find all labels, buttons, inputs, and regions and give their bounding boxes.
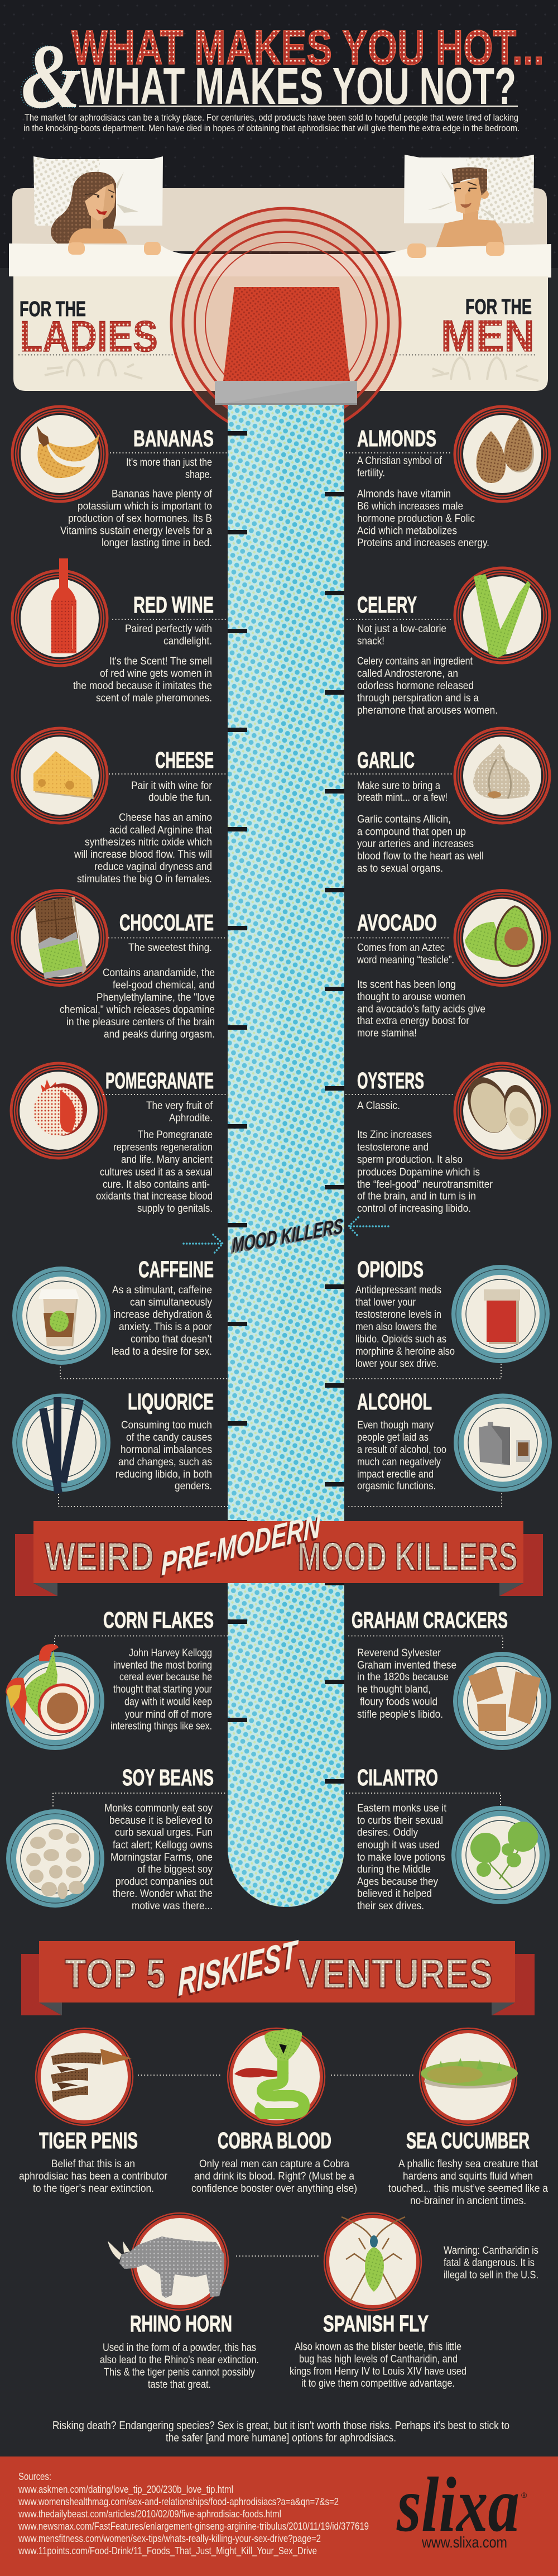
text block: snack! bbox=[357, 635, 384, 647]
concentric heat rings bbox=[171, 208, 400, 437]
banner: top 5 riskiest ventures bbox=[21, 1932, 535, 2015]
text block: and peaks during orgasm. bbox=[104, 1029, 215, 1040]
panel: cobra blood bbox=[191, 2028, 357, 2195]
heading: OPIOIDS bbox=[357, 1256, 424, 1282]
text block: fertility. bbox=[357, 467, 385, 479]
icon: rhino bbox=[108, 2213, 228, 2310]
text block: Only real men can capture a Cobra bbox=[199, 2158, 349, 2170]
text block bbox=[290, 2341, 466, 2389]
man bbox=[436, 168, 504, 247]
text block: of the brain, and in turn is in bbox=[357, 1191, 476, 1202]
text block: It's the Scent! The smell bbox=[109, 656, 212, 667]
text block: increase dehydration & bbox=[113, 1309, 212, 1321]
text block: genders. bbox=[175, 1480, 212, 1492]
text block: Ages because they bbox=[357, 1876, 438, 1887]
text block: desires. Oddly bbox=[357, 1827, 418, 1838]
text block: supply to genitals. bbox=[137, 1203, 213, 1215]
text block: cereal ever because he bbox=[119, 1671, 212, 1683]
banner text: TOP 5 bbox=[65, 1951, 166, 1997]
text block: cultures used it as a sexual bbox=[100, 1167, 213, 1178]
text block: Celery contains an ingredient bbox=[357, 656, 473, 667]
blanket bbox=[9, 243, 551, 278]
text block: cure. It also contains anti- bbox=[103, 1179, 210, 1191]
icon: rooster and cereal bbox=[6, 1644, 104, 1750]
knee wrinkles bbox=[45, 357, 538, 381]
icon: cobra bbox=[228, 2028, 325, 2125]
text block: it to give them competitive advantage. bbox=[301, 2378, 455, 2389]
pre-modern stamp: PRE-MODERN bbox=[161, 1508, 321, 1583]
icon: chocolate bbox=[12, 890, 107, 985]
panel: spanish fly bbox=[290, 2213, 466, 2389]
text block bbox=[112, 1284, 213, 1358]
text block: Monks commonly eat soy bbox=[104, 1803, 213, 1814]
sources: www.womenshealthmag.com/sex-and-relationships/food-aphrodisiacs?a=a&qn=7&s=2 bbox=[18, 2496, 339, 2507]
text block: Also known as the blister beetle, this little bbox=[295, 2341, 461, 2353]
text block: and changes, such as bbox=[118, 1456, 212, 1468]
text block: Comes from an Aztec bbox=[357, 942, 445, 954]
woman bbox=[51, 172, 127, 243]
riskiest stamp: RISKIEST bbox=[178, 1932, 299, 2005]
text block: bug has high levels of Cantharidin, and bbox=[299, 2353, 458, 2365]
footer bbox=[0, 2456, 558, 2576]
hands bbox=[68, 242, 504, 258]
text block: and drink its blood. Right? (Must be a bbox=[194, 2171, 354, 2182]
text block: This & the tiger penis cannot possibly bbox=[104, 2367, 255, 2378]
text block: morphine & heroine also bbox=[355, 1346, 455, 1358]
heading: ALMONDS bbox=[357, 426, 436, 451]
text block: acid called Arginine that bbox=[109, 824, 213, 837]
icon: sea cucumber bbox=[420, 2028, 518, 2125]
text block: that extra energy boost for bbox=[357, 1015, 470, 1027]
panel: chocolate bbox=[12, 890, 225, 1040]
text block: sperm production. It also bbox=[357, 1154, 463, 1166]
heading: CELERY bbox=[357, 592, 417, 618]
text block: there. Wonder what the bbox=[113, 1888, 213, 1900]
text block: reducing libido, in both bbox=[116, 1469, 212, 1480]
text block: their sex drives. bbox=[357, 1900, 424, 1912]
warning note bbox=[444, 2245, 538, 2281]
text block bbox=[60, 942, 215, 1040]
text block: Even though many bbox=[357, 1420, 434, 1431]
icon: coffee cup bbox=[12, 1267, 110, 1365]
text block: stimulates the big O in females. bbox=[77, 873, 212, 885]
panel: pomegranate bbox=[11, 1063, 227, 1215]
mood killers label: MOOD KILLERS bbox=[232, 1214, 343, 1258]
text block: Pair it with wine for bbox=[131, 780, 213, 792]
text block: Proteins and increases energy. bbox=[357, 537, 489, 549]
text block: hardens and squirts fluid when bbox=[403, 2171, 533, 2182]
text block bbox=[191, 2158, 357, 2195]
text block: of red wine gets women in bbox=[100, 668, 212, 680]
text block: pheramone that arouses women. bbox=[357, 705, 498, 716]
icon: liquorice bbox=[12, 1394, 110, 1493]
text block: double the fun. bbox=[148, 792, 212, 804]
text block: kings from Henry IV to Louis XIV have used bbox=[290, 2365, 466, 2378]
text block: invented the most boring bbox=[114, 1660, 212, 1671]
text block: Contains anandamide, the bbox=[103, 967, 215, 979]
sources: www.thedailybeast.com/articles/2010/02/09/five-aphrodisiac-foods.html bbox=[18, 2508, 281, 2520]
title bbox=[19, 21, 544, 127]
banner text: WEIRD bbox=[45, 1535, 154, 1579]
text block: testosterone and bbox=[357, 1141, 429, 1154]
text block: fact alert; Kellogg owns bbox=[113, 1839, 213, 1851]
text block: word meaning “testicle”. bbox=[357, 954, 454, 966]
text block: day with it would keep bbox=[124, 1696, 212, 1708]
text block: Eastern monks use it bbox=[357, 1803, 447, 1814]
text block: combo that doesn’t bbox=[131, 1334, 213, 1345]
for the ladies: FOR THE bbox=[20, 298, 86, 321]
panel: bananas bbox=[12, 407, 227, 549]
text block: men also lowers the bbox=[355, 1321, 437, 1333]
icon: wine bottle bbox=[12, 558, 107, 666]
panel: alcohol bbox=[347, 1389, 552, 1507]
icon: pill bottle bbox=[451, 1265, 550, 1363]
heading: RHINO HORN bbox=[130, 2311, 232, 2336]
icon: garlic bbox=[455, 728, 550, 823]
text block bbox=[355, 1284, 455, 1370]
text block: longer lasting time in bed. bbox=[102, 537, 212, 549]
text block: and avocado’s fatty acids give bbox=[357, 1003, 485, 1015]
icon: beetle bbox=[324, 2213, 421, 2310]
text block: stifle people’s libido. bbox=[357, 1709, 443, 1720]
panel: graham crackers bbox=[349, 1607, 551, 1750]
text block: can simultaneously bbox=[130, 1297, 212, 1308]
heading: SPANISH FLY bbox=[323, 2311, 429, 2336]
text block bbox=[104, 1803, 213, 1912]
text block bbox=[357, 1420, 446, 1492]
text block: oxidants that increase blood bbox=[96, 1191, 213, 1202]
text block: lower your sex drive. bbox=[355, 1358, 439, 1370]
heading: CORN FLAKES bbox=[103, 1607, 214, 1633]
text block: the “feel-good” neurotransmitter bbox=[357, 1179, 493, 1191]
text block: the mood because it imitates the bbox=[73, 680, 212, 692]
closing statement bbox=[52, 2420, 509, 2444]
text block: A Classic. bbox=[357, 1100, 400, 1112]
icon: cheese bbox=[12, 728, 107, 823]
heading: CHOCOLATE bbox=[119, 910, 214, 935]
text block: Aphrodite. bbox=[169, 1112, 213, 1124]
bed base bbox=[13, 276, 548, 391]
text block: synthesizes nitric oxide which bbox=[85, 837, 212, 848]
text block: production of sex hormones. Its B bbox=[68, 513, 212, 525]
text block bbox=[110, 1647, 213, 1732]
text block bbox=[388, 2158, 548, 2207]
sources bbox=[18, 2471, 369, 2557]
icon: flask bbox=[454, 1394, 552, 1492]
warning note: Warning: Cantharidin is bbox=[444, 2245, 538, 2257]
text block bbox=[96, 1100, 213, 1215]
text block: touched... this must’ve seemed like a bbox=[388, 2183, 548, 2195]
panel: avocado bbox=[345, 890, 550, 1039]
text block: Cheese has an amino bbox=[119, 812, 212, 824]
text block: scent of male pheromones. bbox=[96, 692, 212, 704]
heading: BANANAS bbox=[133, 426, 214, 451]
text block: feel-good chemical, and bbox=[113, 979, 215, 991]
arrow: right bbox=[349, 1217, 388, 1236]
right tick marks bbox=[325, 492, 344, 1784]
text block: Garlic contains Allicin, bbox=[357, 814, 451, 825]
text block: product companies out bbox=[116, 1876, 213, 1887]
icon: almonds bbox=[455, 407, 550, 501]
text block: Morningstar Farms, one bbox=[110, 1852, 213, 1863]
text block: to the tiger’s near extinction. bbox=[33, 2183, 154, 2195]
text block: represents regeneration bbox=[113, 1141, 213, 1154]
text block: reduce vaginal dryness and bbox=[94, 861, 212, 873]
thermometer cap bbox=[215, 381, 357, 405]
heading: RED WINE bbox=[133, 592, 214, 618]
panel: corn flakes bbox=[6, 1607, 228, 1750]
text block: candlelight. bbox=[163, 635, 212, 647]
text block: in the 1820s because bbox=[357, 1671, 449, 1683]
text block: blood flow to the heart as well bbox=[357, 850, 484, 862]
for the men bbox=[391, 295, 537, 361]
text block: Belief that this is an bbox=[51, 2158, 135, 2170]
text block: odorless hormone released bbox=[357, 680, 474, 692]
panel: caffeine bbox=[12, 1256, 228, 1379]
text block: chemical," which releases dopamine bbox=[60, 1004, 215, 1016]
sources: www.11points.com/Food-Drink/11_Foods_That_Just_Might_Kill_Your_Sex_Drive bbox=[18, 2545, 317, 2557]
icon: oysters bbox=[455, 1063, 550, 1158]
text block: Paired perfectly with bbox=[125, 623, 212, 635]
text block: taste that great. bbox=[148, 2379, 211, 2391]
text block bbox=[357, 942, 485, 1039]
text block: The Pomegranate bbox=[138, 1129, 213, 1141]
heading: AVOCADO bbox=[357, 910, 437, 935]
panel: cilantro bbox=[347, 1765, 550, 1912]
text block: and life. Many ancient bbox=[121, 1154, 213, 1166]
text block: to make love potions bbox=[357, 1852, 445, 1863]
text block: curb sexual urges. Fun bbox=[115, 1827, 213, 1838]
text block: as to sexual organs. bbox=[357, 863, 443, 874]
text block: Acid which metabolizes bbox=[357, 525, 457, 537]
icon: soy beans bbox=[6, 1809, 104, 1908]
text block: impact erectile and bbox=[357, 1469, 434, 1480]
pillow right bbox=[404, 155, 534, 223]
text block: Its scent has been long bbox=[357, 979, 456, 991]
text block: of the biggest soy bbox=[137, 1864, 213, 1875]
heading: TIGER PENIS bbox=[39, 2128, 138, 2153]
text block: enough it was used bbox=[357, 1839, 440, 1851]
text block: Graham invented these bbox=[357, 1660, 456, 1671]
logo: slixa bbox=[396, 2462, 519, 2548]
text block bbox=[73, 623, 212, 704]
sources: Sources: bbox=[18, 2471, 51, 2482]
sources: www.mensfitness.com/women/sex-tips/whats-really-killing-your-sex-drive?page=2 bbox=[18, 2533, 321, 2544]
text block: lead to a desire for sex. bbox=[112, 1346, 212, 1358]
icon: celery bbox=[455, 568, 550, 663]
text block: Vitamins sustain energy levels for a bbox=[60, 525, 212, 537]
heading: SOY BEANS bbox=[122, 1765, 214, 1790]
panel: rhino horn bbox=[100, 2213, 259, 2391]
text block: will increase blood flow. This will bbox=[74, 849, 212, 861]
ampersand: & bbox=[21, 25, 81, 127]
text block: breath mint... or a few! bbox=[357, 792, 448, 804]
text block: A Christian symbol of bbox=[357, 455, 442, 467]
text block: he thought bland, bbox=[357, 1684, 431, 1695]
text block: Make sure to bring a bbox=[357, 780, 440, 792]
heading: CHEESE bbox=[155, 747, 214, 773]
text block: that lower your bbox=[355, 1297, 416, 1308]
heading: CAFFEINE bbox=[138, 1256, 214, 1282]
heading: COBRA BLOOD bbox=[218, 2128, 331, 2153]
text block: anxiety. This is a poor bbox=[119, 1321, 213, 1333]
panel: red wine bbox=[12, 558, 225, 704]
text block: testosterone levels in bbox=[355, 1309, 441, 1321]
text block bbox=[74, 780, 213, 885]
left tick marks bbox=[228, 431, 247, 1722]
warning note: fatal & dangerous. It is bbox=[444, 2257, 535, 2269]
text block bbox=[357, 455, 489, 549]
text block: John Harvey Kellogg bbox=[129, 1647, 212, 1659]
arrow: left bbox=[184, 1235, 223, 1254]
panel: liquorice bbox=[12, 1389, 228, 1507]
intro paragraph bbox=[23, 112, 519, 133]
panel: almonds bbox=[347, 407, 550, 549]
text block bbox=[19, 2158, 168, 2195]
icon: pomegranate bbox=[11, 1063, 106, 1158]
text block bbox=[357, 1647, 456, 1720]
icon: tiger penis bbox=[36, 2028, 133, 2125]
text block: your arteries and increases bbox=[357, 838, 474, 850]
panel: oysters bbox=[346, 1063, 550, 1215]
text block: Consuming too much bbox=[121, 1420, 212, 1431]
text block: Almonds have vitamin bbox=[357, 488, 451, 500]
text block: aphrodisiac has been a contributor bbox=[19, 2171, 168, 2182]
logo: www.slixa.com bbox=[421, 2534, 507, 2551]
text block: Not just a low-calorie bbox=[357, 623, 446, 635]
panel: soy beans bbox=[6, 1765, 227, 1912]
text block bbox=[116, 1420, 212, 1492]
warning note: illegal to sell in the U.S. bbox=[444, 2269, 538, 2281]
text block: shape. bbox=[185, 469, 212, 481]
heading: GARLIC bbox=[357, 747, 415, 773]
text block: motive was there... bbox=[132, 1900, 213, 1912]
pillow left bbox=[33, 156, 163, 226]
text block: also lead to the Rhino’s near extinction. bbox=[100, 2354, 259, 2366]
text block: a compound that open up bbox=[357, 826, 466, 838]
text block: Bananas have plenty of bbox=[112, 488, 213, 500]
panel: tiger penis bbox=[19, 2028, 168, 2195]
closing statement: the safer [and more humane] options for aphrodisiacs. bbox=[166, 2432, 396, 2444]
text block: to curbs their sexual bbox=[357, 1815, 443, 1827]
text block: more stamina! bbox=[357, 1027, 417, 1039]
text block: called Androsterone, an bbox=[357, 668, 458, 680]
text block: during the Middle bbox=[357, 1864, 431, 1875]
heading: LIQUORICE bbox=[128, 1389, 214, 1414]
text block: Reverend Sylvester bbox=[357, 1647, 441, 1659]
for the men: FOR THE bbox=[465, 295, 532, 319]
text block: Used in the form of a powder, this has bbox=[103, 2342, 256, 2354]
text block: control of increasing libido. bbox=[357, 1203, 471, 1215]
thermometer red top bbox=[223, 287, 350, 381]
icon: avocado bbox=[455, 890, 550, 985]
text block: of the candy causes bbox=[126, 1432, 212, 1444]
text block: The sweetest thing. bbox=[128, 942, 212, 954]
banner: weird pre-modern mood killers bbox=[15, 1508, 543, 1596]
ampersand: & bbox=[19, 25, 80, 127]
text block: It's more than just the bbox=[126, 457, 212, 469]
icon: crackers bbox=[453, 1652, 551, 1750]
text block: Its Zinc increases bbox=[357, 1129, 432, 1141]
heading: CILANTRO bbox=[357, 1765, 438, 1790]
text block: because it is believed to bbox=[109, 1815, 213, 1827]
bed illustration bbox=[9, 155, 551, 391]
panel: garlic bbox=[345, 728, 550, 874]
text block: a result of alcohol, too bbox=[357, 1444, 446, 1456]
text block: thought that starting your bbox=[113, 1684, 213, 1695]
text block: hormonal imbalances bbox=[121, 1444, 212, 1456]
panel: opioids bbox=[347, 1256, 550, 1379]
text block bbox=[100, 2342, 259, 2391]
text block: in the pleasure centers of the brain bbox=[66, 1016, 215, 1028]
text block: B6 which increases male bbox=[357, 500, 463, 513]
text block: Antidepressant meds bbox=[355, 1284, 441, 1296]
text block: your mind off of more bbox=[125, 1709, 212, 1720]
panel: celery bbox=[347, 568, 550, 716]
text block: produces Dopamine which is bbox=[357, 1167, 480, 1178]
text block bbox=[357, 1803, 447, 1912]
banner: top 5 riskiest ventures: VENTURES bbox=[298, 1951, 493, 1997]
panel: cheese bbox=[12, 728, 225, 885]
text block: A phallic fleshy sea creature that bbox=[398, 2158, 538, 2170]
text block: As a stimulant, caffeine bbox=[112, 1284, 212, 1296]
text block: orgasmic functions. bbox=[357, 1480, 436, 1492]
text block: libido. Opioids such as bbox=[355, 1334, 446, 1345]
heading: ALCOHOL bbox=[357, 1389, 432, 1414]
logo: ® bbox=[521, 2491, 527, 2499]
icon: bananas bbox=[12, 407, 107, 501]
text block: believed it helped bbox=[357, 1888, 432, 1900]
text block bbox=[60, 457, 213, 549]
for the ladies: LADIES bbox=[20, 312, 158, 361]
text block: Phenylethylamine, the "love bbox=[97, 992, 215, 1003]
text block: floury foods would bbox=[360, 1696, 437, 1708]
text block bbox=[357, 780, 484, 874]
connector dots row one bbox=[138, 2075, 413, 2076]
text block: The very fruit of bbox=[146, 1100, 213, 1112]
thermometer tube bbox=[228, 405, 344, 1907]
text block: thought to arouse women bbox=[357, 991, 465, 1003]
sources: www.askmen.com/dating/love_tip_200/230b_love_tip.html bbox=[18, 2484, 233, 2496]
text block: through perspiration and is a bbox=[357, 692, 479, 704]
sources: www.newsmax.com/FastFeatures/enlargement-ginseng-arginine-tribulus/2010/11/19/id/377619 bbox=[18, 2521, 369, 2532]
text block: confidence booster over anything else) bbox=[191, 2183, 357, 2195]
heading: OYSTERS bbox=[357, 1068, 424, 1093]
text block: hormone production & Folic bbox=[357, 513, 475, 525]
heading: POMEGRANATE bbox=[105, 1068, 214, 1093]
panel: sea cucumber bbox=[388, 2028, 548, 2207]
text block: much can negatively bbox=[357, 1456, 441, 1468]
text block: potassium which is important to bbox=[78, 500, 212, 513]
text block bbox=[357, 1100, 493, 1215]
text block: interesting things like sex. bbox=[110, 1720, 212, 1732]
icon: cilantro leaves bbox=[451, 1806, 550, 1904]
text block bbox=[357, 623, 498, 716]
text block: people get laid as bbox=[357, 1432, 429, 1444]
connector dots row two bbox=[237, 2255, 319, 2257]
for the men: MEN bbox=[441, 311, 535, 361]
text block: no-brainer in ancient times. bbox=[410, 2195, 526, 2207]
